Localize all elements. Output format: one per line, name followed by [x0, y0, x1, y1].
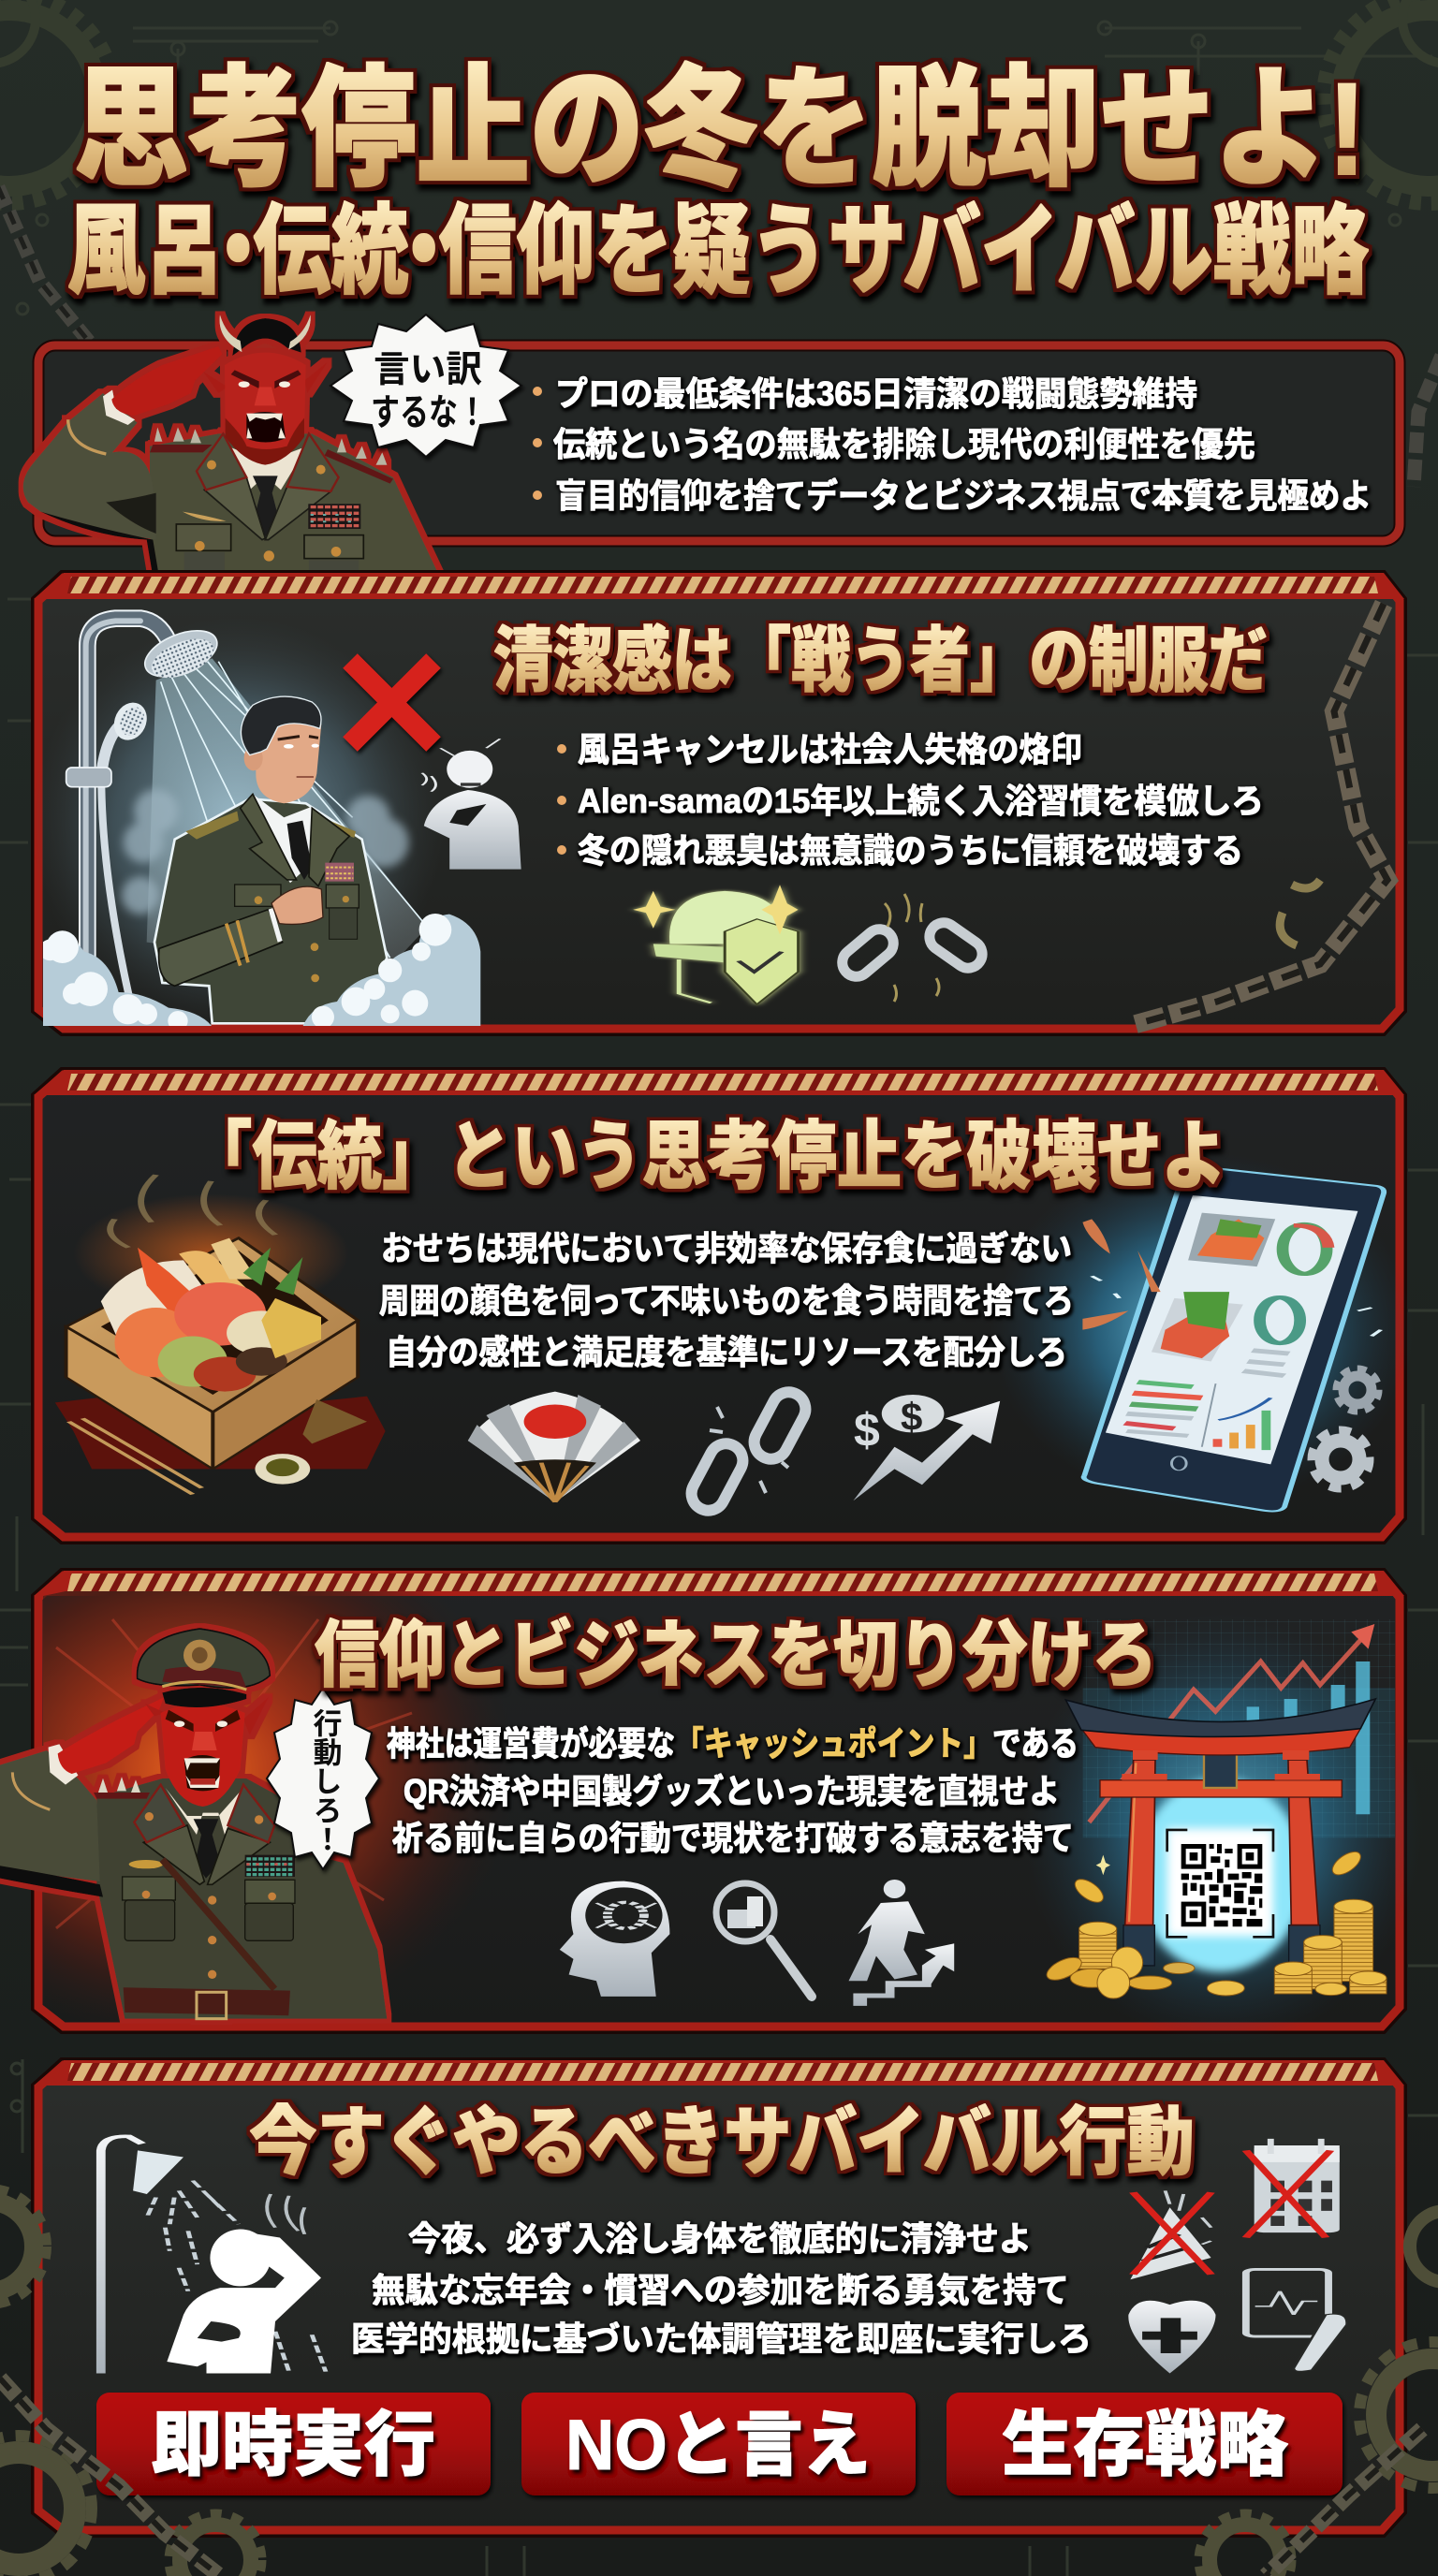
- title: 風呂・伝統・信仰を疑うサバイバル戦略: [67, 197, 1369, 305]
- icon: walking figure on stairs: [848, 1880, 954, 2006]
- text block: tradition: 自分の感性と満足度を基準にリソースを配分しろ: [386, 1333, 1067, 1371]
- left upper chain: [0, 187, 89, 342]
- icon: heart with cross: [1128, 2301, 1215, 2373]
- icon: folding fan: [468, 1392, 640, 1502]
- icon: head with gear brain: [560, 1881, 669, 1997]
- bottom chains: [0, 2378, 1422, 2576]
- text block: belief and business: 神社は運営費が必要な「キャッシュポイント」である: [387, 1724, 1078, 1763]
- icon: red cross: [350, 661, 433, 744]
- speech bubble: 行動しろ: 行動しろ！: [309, 1708, 342, 1853]
- heading: belief and business: 信仰とビジネスを切り分けろ: [315, 1614, 1157, 1696]
- panel: belief and business: [34, 1571, 1404, 2031]
- icon: money growth arrow: $: [901, 1395, 922, 1439]
- bottom gears: [0, 2188, 1438, 2576]
- panel: cleanliness: [34, 573, 1404, 1033]
- button: say no: NOと言え: [565, 2406, 871, 2485]
- right upper chain: [1414, 356, 1438, 487]
- illustration: smartphone dashboard: [990, 1152, 1413, 1511]
- button: survival strategy: [946, 2393, 1343, 2496]
- heading: tradition: 「伝統」という思考停止を破壊せよ: [187, 1115, 1226, 1198]
- decorative chain and stains: panel 2 right: [1133, 604, 1387, 1025]
- text block: tradition: おせちは現代において非効率な保存食に過ぎない: [381, 1229, 1072, 1267]
- icon: broken link: [685, 1386, 812, 1516]
- text block: summary bullets: 伝統という名の無駄を排除し現代の利便性を優先: [553, 425, 1255, 463]
- text block: cleanliness bullets: Alen-samaの15年以上続く入浴習慣を模倣しろ: [578, 782, 1264, 820]
- top right gear: [1324, 0, 1438, 203]
- icon: helmet with shield: [633, 885, 799, 1004]
- button: say no: [521, 2393, 916, 2496]
- speech bubble: 行動しろ: [267, 1688, 379, 1869]
- text block: summary bullets: プロの最低条件は365日清潔の戦闘態勢維持: [555, 374, 1197, 413]
- icon: vital monitor with pill: [1246, 2269, 1347, 2371]
- speech bubble: 言い訳するな: [330, 315, 521, 457]
- illustration: torii gate with QR code and coins: [1023, 1613, 1423, 2043]
- illustration: saluting red devil officer: [23, 315, 440, 578]
- heading: cleanliness: 清潔感は「戦う者」の制服だ: [493, 622, 1268, 701]
- speech bubble: 言い訳するな: 言い訳: [374, 350, 482, 390]
- icon: cancelled party popper: [1130, 2190, 1211, 2279]
- panel: summary: [38, 345, 1400, 541]
- text block: cleanliness bullets: [557, 730, 1264, 870]
- text block: summary bullets: 盲目的信仰を捨てデータとビジネス視点で本質を見極めよ: [555, 476, 1372, 515]
- heading: survival actions: 今すぐやるべきサバイバル行動: [249, 2100, 1195, 2184]
- illustration: osechi box: [55, 1175, 386, 1494]
- text block: belief and business: 祈る前に自らの行動で現状を打破する意志を持て: [392, 1819, 1074, 1857]
- icon: money growth arrow: [853, 1395, 1000, 1500]
- top left gear: [0, 0, 114, 203]
- button: immediate action: [96, 2393, 491, 2496]
- icon: broken chain: [837, 894, 988, 1002]
- icon: magnifier with money: [716, 1883, 812, 1997]
- icon: showering person: [101, 2136, 326, 2373]
- title: [67, 55, 1369, 305]
- text block: survival actions: 医学的根拠に基づいた体調管理を即座に実行しろ: [351, 2320, 1092, 2358]
- text block: belief and business: [387, 1724, 1078, 1857]
- speech bubble: 言い訳するな: するな！: [371, 393, 487, 433]
- text block: survival actions: 無駄な忘年会・慣習への参加を断る勇気を持て: [372, 2271, 1069, 2309]
- text block: tradition: [379, 1229, 1074, 1371]
- illustration: red burst background: [43, 1591, 481, 2005]
- icon: money growth arrow: $: [854, 1404, 880, 1456]
- illustration: shouting devil officer with cap: [0, 1629, 387, 2019]
- text block: survival actions: 今夜、必ず入浴し身体を徹底的に清浄せよ: [408, 2219, 1032, 2258]
- button: survival strategy: 生存戦略: [1002, 2406, 1288, 2485]
- text block: cleanliness bullets: 風呂キャンセルは社会人失格の烙印: [578, 730, 1082, 768]
- text block: survival actions: [351, 2219, 1092, 2358]
- text block: cleanliness bullets: 冬の隠れ悪臭は無意識のうちに信頼を破壊する: [578, 831, 1243, 870]
- illustration: officer in shower: [31, 618, 480, 1031]
- text block: belief and business: QR決済や中国製グッズといった現実を直視せよ: [404, 1772, 1060, 1810]
- panel: tradition: [34, 1070, 1404, 1542]
- text block: summary bullets: [533, 374, 1372, 515]
- icon: stressed person: [422, 739, 521, 870]
- text block: tradition: 周囲の顔色を伺って不味いものを食う時間を捨てろ: [379, 1281, 1074, 1320]
- icon: cancelled calendar: [1246, 2139, 1340, 2237]
- button: immediate action: 即時実行: [151, 2406, 435, 2485]
- icon: gears beside phone: [1312, 1368, 1379, 1488]
- panel: survival actions: [34, 2060, 1404, 2535]
